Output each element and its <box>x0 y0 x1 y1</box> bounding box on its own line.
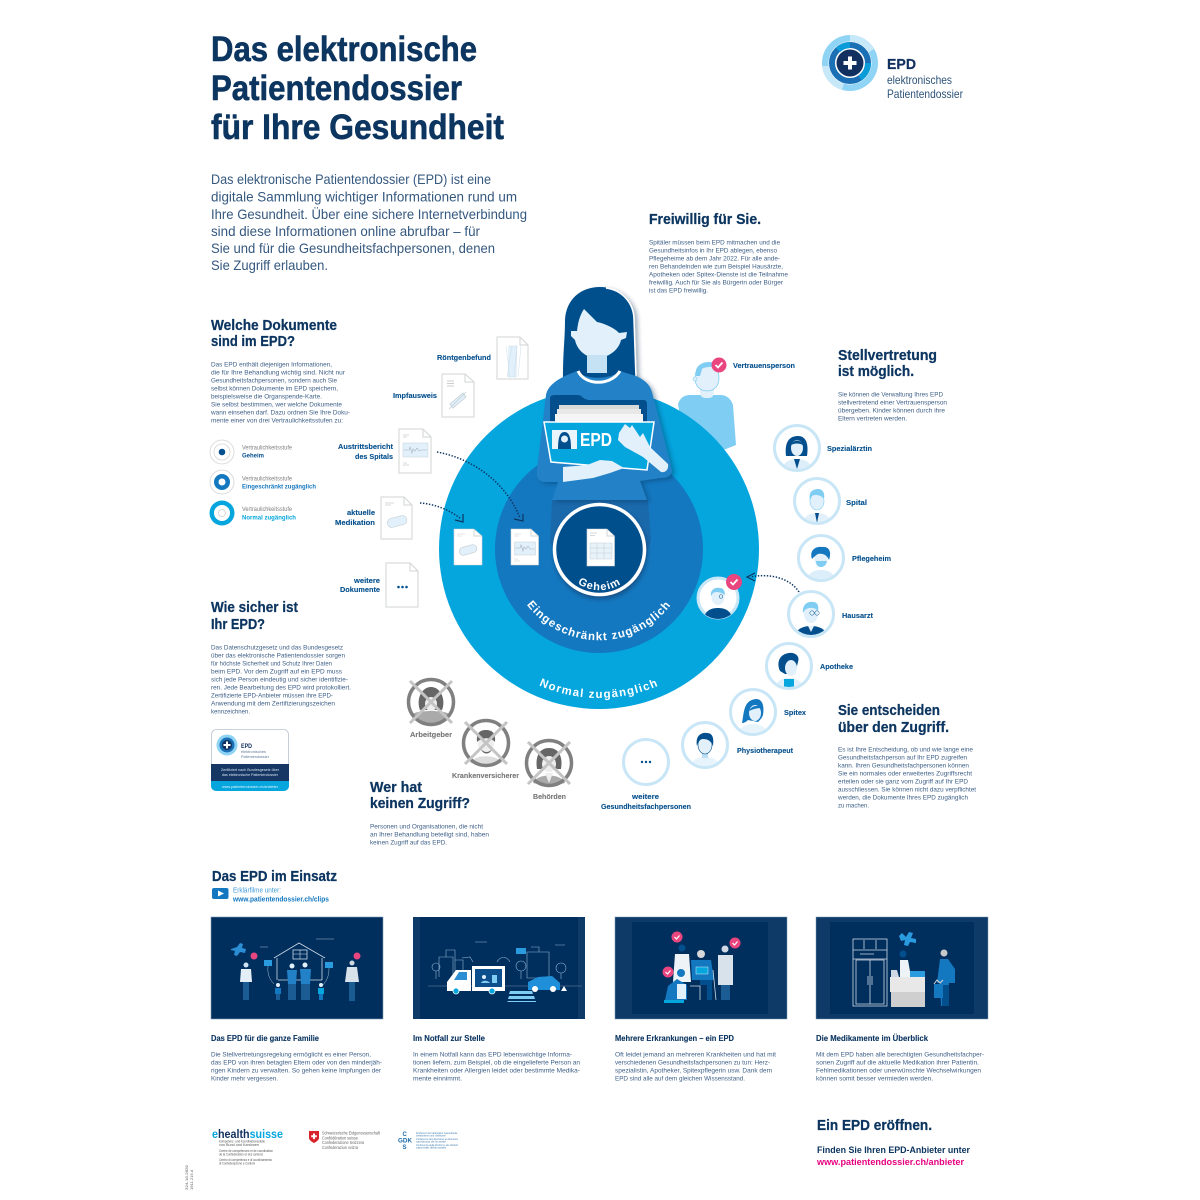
logo: EPD <box>822 35 963 101</box>
icon: Hausarzt <box>788 592 873 639</box>
legend: Vertraulichkeitsstufen: Vertraulichkeitsstufe <box>242 506 292 513</box>
text block: Welche Dokumente: Gesundheitsfachpersonen, sondern auch Sie <box>211 377 337 384</box>
text block: Wie sicher: Das Datenschutzgesetz und das Bundesgesetz <box>211 644 343 651</box>
footer logo: GDK CDS: Conférence des directrices et directeurs <box>416 1138 459 1141</box>
infographic canvas <box>186 35 988 1190</box>
text block: Welche Dokumente: Sie selbst bestimmen, wer welche Dokumente <box>211 401 342 408</box>
text block: Sie entscheiden: über den Zugriff. <box>838 719 949 736</box>
text block: Wie sicher: Ihr EPD? <box>211 616 265 633</box>
icon: Spital <box>794 478 867 526</box>
footer logo: ehealthsuisse: Centro di competenza e di coordinamento <box>219 1158 272 1162</box>
doctor right <box>345 960 359 1001</box>
imprint code <box>184 1164 194 1190</box>
legend: Vertraulichkeitsstufen: Normal zugänglich <box>242 514 296 522</box>
caption: Notfall: In einem Notfall kann das EPD lebenswichtige Informa- <box>413 1051 572 1058</box>
text block: Freiwillig: Freiwillig für Sie. <box>649 211 761 228</box>
intro text: Das elektronische Patientendossier (EPD) ist eine <box>211 171 491 187</box>
documents inside circle <box>454 529 538 565</box>
intro text: sind diese Informationen online abrufbar – für <box>211 223 480 239</box>
text block: Freiwillig: ren Behandelnden wie zum Beispiel Hausärzte, <box>649 263 783 270</box>
icon: Spitex: Spitex <box>784 708 807 717</box>
text block: Stellvertretung: ist möglich. <box>838 363 914 380</box>
text block: Welche Dokumente: Das EPD enthält diejenigen Informationen, <box>211 361 332 368</box>
caption: Medikamente: Die Medikamente im Überblick <box>816 1034 929 1043</box>
footer logo: ehealthsuisse: Kompetenz- und Koordinationsstelle <box>219 1140 265 1144</box>
footer logo: GDK CDS: Conferenza delle direttrici e dei direttori <box>416 1144 458 1147</box>
footer logo: ehealthsuisse: ehealthsuisse <box>212 1127 283 1141</box>
text block: Sie entscheiden: Sie ein normales oder erweitertes Zugriffsrecht <box>838 770 972 777</box>
title: für Ihre Gesundheit <box>211 108 504 147</box>
footer logo: ehealthsuisse: di Confederazione e Cantoni <box>219 1162 255 1166</box>
caption: Erkrankungen: Mehrere Erkrankungen – ein EPD <box>615 1034 734 1043</box>
icon: Physiotherapeut: Physiotherapeut <box>737 746 793 755</box>
document: aktuelle Medikation <box>335 497 412 539</box>
text block: Sie entscheiden: Sie entscheiden <box>838 702 940 719</box>
caption: Medikamente: Fehlmedikationen oder unerwünschte Wechselwirkungen <box>816 1067 981 1074</box>
imprint code: 324-16.2820 <box>184 1164 189 1190</box>
text block: Freiwillig: Gesundheitsinfos in Ihr EPD ablegen, ebenso <box>649 247 777 254</box>
caption: Notfall: Krankheiten oder Allergien leidet oder bestimmte Medika- <box>413 1067 580 1074</box>
icon: Spital: Spital <box>846 498 867 507</box>
text block: Wie sicher: kennzeichnen. <box>211 708 250 715</box>
heading: Das EPD im Einsatz: www.patientendossier.ch/clips <box>232 896 329 904</box>
certification badge: EPD <box>241 744 253 750</box>
text block: Wie sicher: über das elektronische Patientendossier sorgen <box>211 652 345 659</box>
footer logo: GDK CDS: Konferenz der kantonalen Gesundheits- <box>416 1132 458 1135</box>
text block: Freiwillig: freiwillig. Auch für Sie als Bürgerin oder Bürger <box>649 279 784 286</box>
text block: Stellvertretung: Stellvertretung <box>838 347 937 364</box>
intro text: Ihre Gesundheit. Über eine sichere Internetverbindung <box>211 205 527 222</box>
footer logo: GDK CDS: direktorinnen und -direktoren <box>416 1134 447 1138</box>
document: weitere Dokumente: Dokumente <box>340 585 380 594</box>
heading: Das EPD im Einsatz: Das EPD im Einsatz <box>212 868 337 885</box>
label: Normal zugänglich: Normal zugänglich <box>540 678 658 700</box>
text block: Wer hat keinen Zugriff: Personen und Organisationen, die nicht <box>370 823 483 830</box>
document: Austrittsbericht: Austrittsbericht <box>338 442 393 451</box>
icon: Arbeitgeber no access: Arbeitgeber <box>410 730 452 739</box>
caption: Notfall: Im Notfall zur Stelle <box>413 1034 486 1043</box>
icon: Spitex <box>730 690 807 737</box>
icon: Hausarzt: Hausarzt <box>842 611 873 620</box>
certification badge: Zertifiziert nach Bundesgesetz über <box>221 768 280 772</box>
text block: Wie sicher: beim EPD. Vor dem Zugriff auf ein EPD muss <box>211 668 343 675</box>
center circle: Geheim <box>552 502 650 602</box>
intro text: Sie Zugriff erlauben. <box>211 257 328 273</box>
call to action: Ein EPD eröffnen: Finden Sie Ihren EPD-Anbieter unter <box>817 1145 970 1156</box>
text block: Welche Dokumente: selbst können Dokumente im EPD speichern, <box>211 385 338 392</box>
text block: Freiwillig: Pflegeheime ab dem Jahr 2022. Für alle ande- <box>649 255 780 262</box>
text block: Stellvertretung: Eltern vertreten werden. <box>838 415 907 422</box>
heading: Das EPD im Einsatz: Erklärfilme unter: <box>233 888 281 894</box>
text block: Welche Dokumente: die für Ihre Behandlung wichtig sind. Nicht nur <box>211 369 346 376</box>
text block: Wie sicher: ren. Jede Bearbeitung des EPD wird protokolliert. <box>211 684 351 691</box>
document: Austrittsbericht: des Spitals <box>355 452 393 461</box>
text block: Wer hat keinen Zugriff: an Ihrer Behandlung beteiligt sind, haben <box>370 831 489 838</box>
icon: weitere Gesundheitsfachpersonen: Gesundheitsfachpersonen <box>601 802 691 811</box>
icon: Krankenversicherer no access: Krankenversicherer <box>452 771 519 780</box>
icon: weitere Gesundheitsfachpersonen: weitere <box>631 792 659 801</box>
text block: Sie entscheiden <box>837 702 976 809</box>
footer logo: ehealthsuisse: von Bund und Kantonen <box>219 1143 259 1147</box>
icon: secret document <box>587 529 614 566</box>
title <box>211 30 504 147</box>
text block: Wer hat keinen Zugriff: keinen Zugriff auf das EPD. <box>370 839 447 846</box>
icon: Spezialärztin: Spezialärztin <box>827 444 872 453</box>
caption: Medikamente <box>816 1034 984 1082</box>
caption: Erkrankungen: EPD sind alle auf dem gleichen Wissensstand. <box>615 1075 745 1082</box>
icon: weitere Gesundheitsfachpersonen <box>601 740 691 811</box>
legend: Vertraulichkeitsstufen: Vertraulichkeitsstufe <box>242 476 292 482</box>
caption: Notfall: tionen liefern, zum Beispiel, ob die eingelieferte Person an <box>413 1059 580 1066</box>
certification badge: Patientendossier <box>241 755 270 759</box>
intro text: Sie und für die Gesundheitsfachpersonen, denen <box>211 240 495 256</box>
legend: Vertraulichkeitsstufen: Eingeschränkt zugänglich <box>242 484 316 490</box>
imprint code: 1911.215.d <box>189 1170 194 1190</box>
text block: Welche Dokumente: sind im EPD? <box>211 333 295 350</box>
icon: Spezialärztin <box>774 426 872 473</box>
footer logo: Swiss Confederation: Confédération suisse <box>322 1136 358 1140</box>
caption: Medikamente: sonen Zugriff auf die aktuelle Medikation ihrer Patientin. <box>816 1059 979 1066</box>
text block: Wie sicher: sich jede Person eindeutig und sicher identifizie- <box>211 676 348 683</box>
logo: EPD: Patientendossier <box>887 87 963 101</box>
text block: Wer hat keinen Zugriff: keinen Zugriff? <box>370 795 470 812</box>
intro text: digitale Sammlung wichtiger Informationen rund um <box>211 188 517 204</box>
text block: Wie sicher: Zertifizierte EPD-Anbieter müssen ihre EPD- <box>211 692 333 699</box>
footer logo: Swiss Confederation: Confederaziun svizra <box>322 1145 358 1150</box>
intro text <box>211 171 527 273</box>
caption: Familie <box>211 1034 382 1082</box>
text block: Welche Dokumente: mente einer von drei Vertraulichkeitsstufen zu: <box>211 417 343 424</box>
icon: Apotheke <box>766 644 853 691</box>
text block: Wie sicher: Anwendung mit dem Zertifizierungszeichen <box>211 700 335 707</box>
icon: Behörden no access <box>526 740 572 801</box>
text block: Welche Dokumente <box>210 317 350 424</box>
title: Das elektronische <box>211 30 477 69</box>
certification badge: das elektronische Patientendossier <box>222 773 279 777</box>
text block: Freiwillig <box>649 211 788 294</box>
text block: Sie entscheiden: erteilen oder sie ganz vom Zugriff auf Ihr EPD <box>838 778 968 785</box>
heading: Das EPD im Einsatz <box>212 868 337 904</box>
document: Impfausweis <box>393 374 474 417</box>
text block: Sie entscheiden: werden, die Dokumente Ihres EPD zugänglich <box>837 794 968 801</box>
legend: Vertraulichkeitsstufen: Vertraulichkeitsstufe <box>242 444 292 452</box>
person with EPD dossier: EPD <box>580 430 612 450</box>
person: Vertrauensperson: Vertrauensperson <box>733 361 795 370</box>
caption: Familie: Das EPD für die ganze Familie <box>211 1034 320 1043</box>
legend: Vertraulichkeitsstufen <box>210 440 316 526</box>
text block: Wer hat keinen Zugriff <box>370 779 489 846</box>
footer logo: ehealthsuisse <box>212 1127 283 1166</box>
text block: Sie entscheiden: Es ist Ihre Entscheidung, ob und wie lange eine <box>838 746 973 753</box>
caption: Erkrankungen: spezialistin, Apotheker, Spitexpflegerin usw. Dank dem <box>615 1067 772 1074</box>
text block: Sie entscheiden: ausschliessen. Sie können nicht dazu verpflichtet <box>838 786 976 793</box>
panel: family illustration <box>211 917 383 1019</box>
document: aktuelle Medikation: Medikation <box>335 518 375 527</box>
text block: Wie sicher <box>211 599 351 715</box>
arrow: Medikation to circle <box>420 503 463 522</box>
text block: Freiwillig: Spitäler müssen beim EPD mitmachen und die <box>649 239 780 246</box>
text block: Stellvertretung <box>838 347 947 422</box>
document: Impfausweis: Impfausweis <box>393 391 437 400</box>
footer logo: ehealthsuisse: Centre de compétences et de coordination <box>219 1149 273 1153</box>
panel: multiple illnesses illustration <box>615 917 787 1019</box>
footer logo: GDK CDS <box>398 1132 459 1151</box>
caption: Familie: Die Stellvertretungsregelung ermöglicht es einer Person, <box>211 1051 371 1058</box>
footer logo: GDK CDS: cantonali della sanità <box>416 1146 447 1150</box>
document: Röntgenbefund <box>437 337 528 379</box>
call to action: Ein EPD eröffnen: www.patientendossier.ch/anbieter <box>816 1157 964 1168</box>
caption: Familie: rigen Kindern zu verwalten. So gehen keine Impfungen der <box>211 1067 382 1074</box>
document: weitere Dokumente: weitere <box>353 576 380 585</box>
doctor left <box>240 962 252 1000</box>
certification badge: elektronisches <box>241 750 266 754</box>
footer logo: GDK CDS: S <box>402 1145 407 1151</box>
legend: Vertraulichkeitsstufen: Geheim <box>242 452 264 460</box>
text block: Sie entscheiden: zu machen. <box>838 802 869 809</box>
text block: Wer hat keinen Zugriff: Wer hat <box>370 779 422 796</box>
icon: Apotheke: Apotheke <box>820 662 853 671</box>
text block: Welche Dokumente: beispielsweise die Organspende-Karte. <box>211 393 322 400</box>
call to action: Ein EPD eröffnen: Ein EPD eröffnen. <box>817 1117 932 1134</box>
text block: Freiwillig: ist das EPD freiwillig. <box>649 287 708 294</box>
panel: medication illustration <box>816 917 988 1019</box>
caption: Familie: Kinder mehr vergessen. <box>211 1075 278 1082</box>
document: Austrittsbericht <box>338 429 431 473</box>
text block: Stellvertretung: übergeben. Kinder können durch ihre <box>838 407 945 414</box>
caption: Medikamente: Mit dem EPD haben alle berechtigten Gesundheitsfachper- <box>816 1051 984 1058</box>
chart: concentric access circles <box>439 398 759 709</box>
footer logo: Swiss Confederation: Schweizerische Eidgenossenschaft <box>322 1130 381 1136</box>
family <box>275 962 324 1000</box>
title: Patientendossier <box>211 69 462 108</box>
caption: Medikamente: können somit besser vermieden werden. <box>816 1075 933 1082</box>
text block: Welche Dokumente: wann einsehen darf. Dazu ordnen Sie Ihre Doku- <box>210 409 350 416</box>
caption: Erkrankungen: Oft leidet jemand an mehreren Krankheiten und hat mit <box>615 1051 776 1058</box>
person with EPD dossier <box>537 287 672 560</box>
icon: Physiotherapeut <box>682 722 793 770</box>
text block: Stellvertretung: Sie können die Verwaltung Ihres EPD <box>838 391 943 398</box>
document: Röntgenbefund: Röntgenbefund <box>437 353 491 362</box>
caption: Erkrankungen: verschiedenen Gesundheitsfachpersonen zu tun: Herz- <box>615 1059 770 1066</box>
caption: Notfall: mente einnimmt. <box>413 1075 462 1082</box>
footer logo: Swiss Confederation: Confederazione Svizzera <box>322 1140 364 1145</box>
logo: EPD: elektronisches <box>887 73 952 87</box>
arrow: Hausarzt to access <box>747 573 799 592</box>
person: Vertrauensperson <box>678 358 795 453</box>
certification badge: www.patientendossier.ch/anbieter <box>222 785 279 789</box>
caption: Erkrankungen <box>615 1034 776 1082</box>
text block: Freiwillig: Apotheken oder Spitex-Dienste ist die Teilnahme <box>649 271 788 278</box>
document: weitere Dokumente <box>340 563 418 607</box>
footer logo: Swiss Confederation <box>309 1130 381 1150</box>
text block: Sie entscheiden: kann. Ihren Gesundheitsfachpersonen können <box>838 762 969 769</box>
icon: Pflegeheim <box>798 536 891 583</box>
certification badge <box>211 730 289 791</box>
footer logo: GDK CDS: GDK <box>398 1138 413 1144</box>
document: aktuelle Medikation: aktuelle <box>347 508 375 517</box>
icon: Pflegeheim: Pflegeheim <box>852 554 891 563</box>
icon: Behörden no access: Behörden <box>533 792 566 801</box>
text block: Welche Dokumente: Welche Dokumente <box>211 317 337 334</box>
icon: video <box>212 888 228 899</box>
call to action: Ein EPD eröffnen <box>816 1117 970 1168</box>
icon: Hausarzt with access <box>698 574 742 622</box>
text block: Wie sicher: Wie sicher ist <box>211 599 298 616</box>
icon: Krankenversicherer no access <box>452 720 519 780</box>
footer logo: GDK CDS: C <box>402 1132 408 1138</box>
arrow: Austrittsbericht to circle <box>437 452 523 521</box>
caption: Notfall <box>413 1034 580 1082</box>
text block: Wie sicher: für höchste Sicherheit und Schutz Ihrer Daten <box>211 660 332 667</box>
logo: EPD: EPD <box>887 56 916 73</box>
caption: Familie: das EPD von ihren betagten Eltern oder von den minderjäh- <box>211 1059 382 1066</box>
footer logo: ehealthsuisse: de la Confédération et des cantons <box>219 1152 263 1156</box>
label: Eingeschränkt zugänglich: Eingeschränkt zugänglich <box>527 600 670 640</box>
panel: emergency illustration <box>413 917 585 1019</box>
footer logo: GDK CDS: cantonaux de la santé <box>416 1140 447 1144</box>
text block: Sie entscheiden: Gesundheitsfachperson auf Ihr EPD zugreifen <box>838 754 967 761</box>
text block: Stellvertretung: stellvertretend einer Vertrauensperson <box>838 399 947 406</box>
label: Geheim: Geheim <box>579 578 620 590</box>
icon: Arbeitgeber no access <box>408 680 454 739</box>
